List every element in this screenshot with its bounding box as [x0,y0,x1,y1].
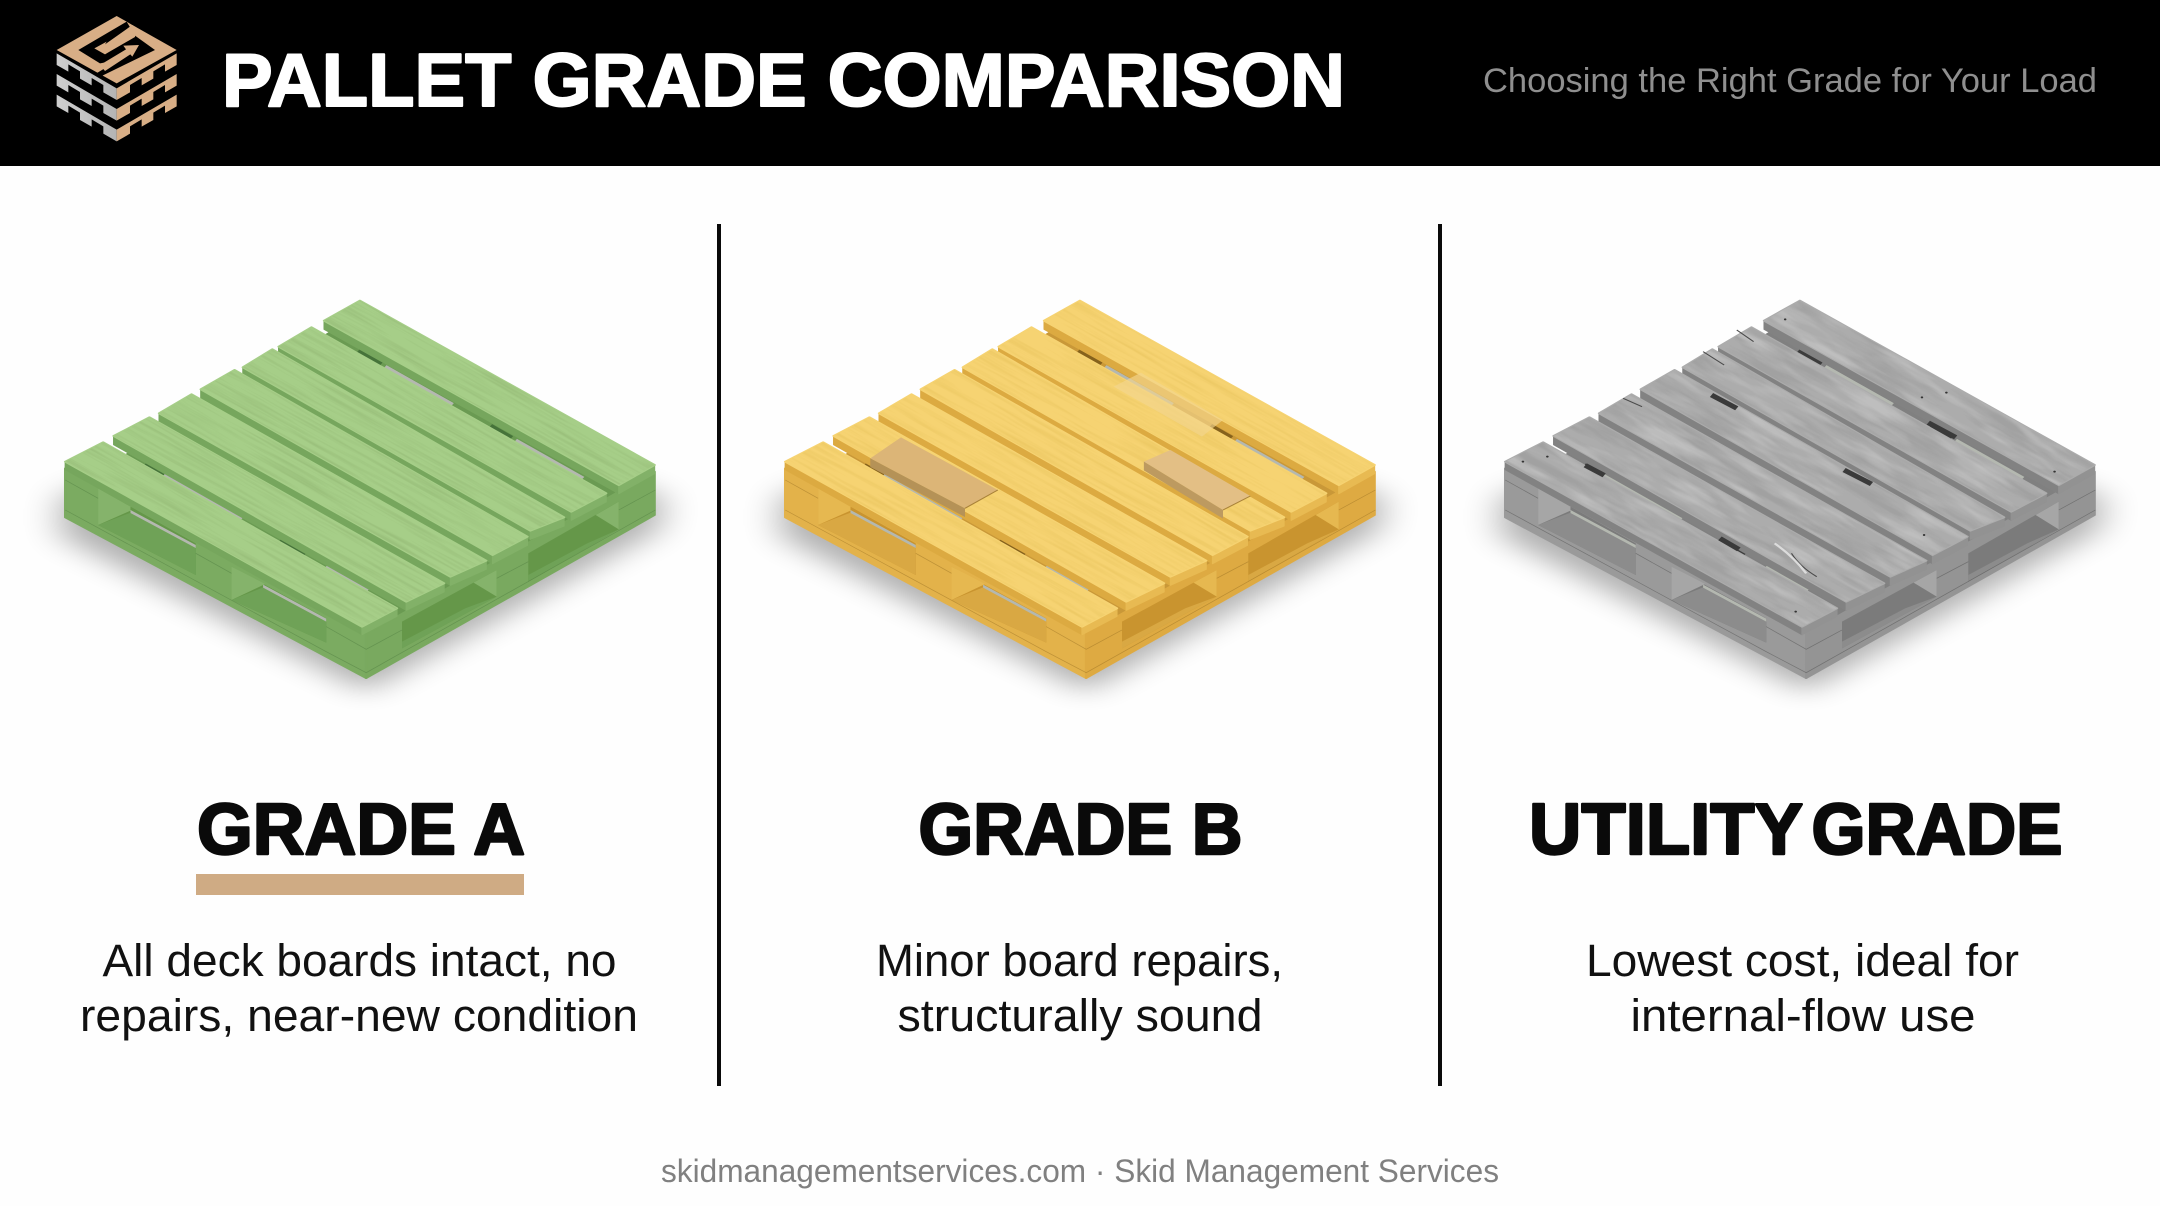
description: grade A: repairs, near-new condition [80,990,638,1041]
panel: utility grade [1480,300,2122,1032]
description: grade A: All deck boards intact, no [102,935,616,986]
highlight underline [196,874,524,895]
column divider left [717,224,721,1086]
damage marks and nails [1522,318,2056,613]
heading: utility grade: UTILITY [1529,790,1803,870]
icon: grey worn pallet [1480,300,2122,699]
subtitle: Choosing the Right Grade for Your Load [1483,62,2097,100]
heading: grade A: GRADE A [197,790,525,870]
icon: green pallet [40,300,682,699]
description: utility grade: Lowest cost, ideal for [1586,935,2019,986]
header bar [0,0,2160,166]
description: grade B [876,935,1283,1041]
title: PALLET GRADE COMPARISON [222,38,1345,122]
column divider right [1438,224,1442,1086]
description: grade B: structurally sound [898,990,1262,1041]
repair patch left [870,437,998,517]
panel: grade A [40,300,682,1040]
icon: logo pallet cube [57,16,177,141]
panel: grade B [760,300,1402,1040]
footer: skidmanagementservices.com · Skid Management Services [661,1153,1499,1189]
lighter board section [1114,373,1223,437]
heading: utility grade [1529,790,2062,870]
repair patch right [1144,450,1250,519]
description: utility grade: internal-flow use [1630,990,1976,1041]
heading: grade B: GRADE B [918,790,1242,870]
description: grade B: Minor board repairs, [876,935,1283,986]
description: grade A [80,935,638,1041]
heading: utility grade: GRADE [1812,790,2062,870]
description: utility grade [1586,935,2019,1041]
icon: yellow pallet with repaired boards [760,300,1402,699]
